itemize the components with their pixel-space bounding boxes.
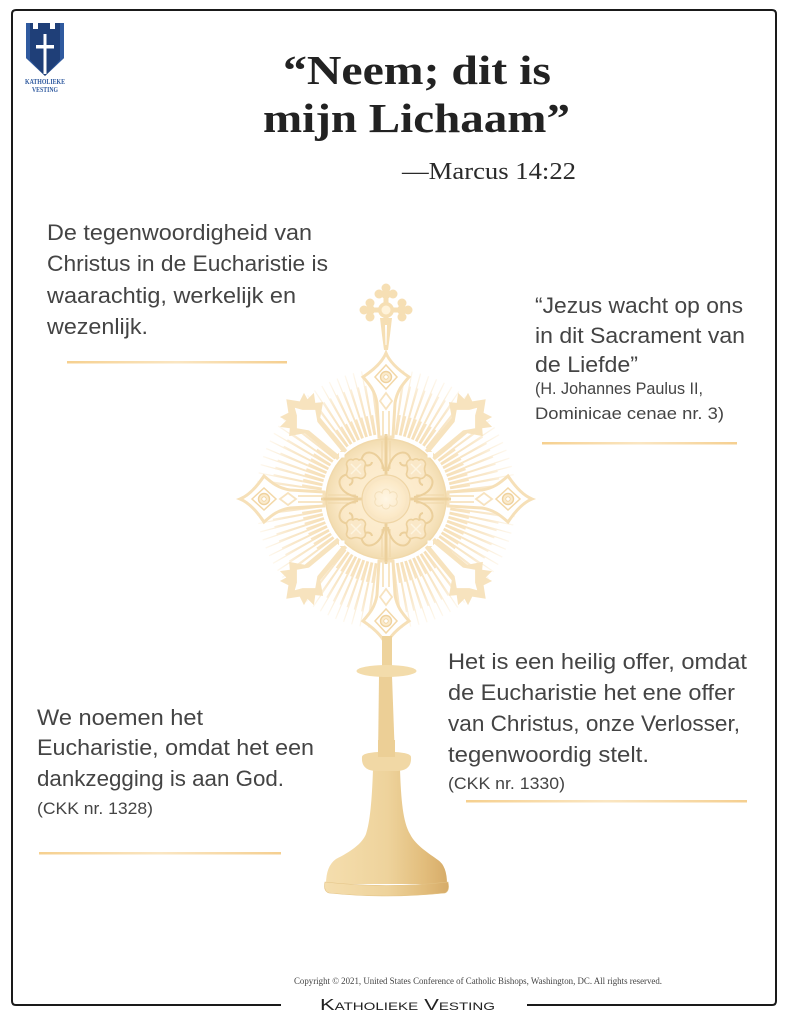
stand — [324, 636, 449, 896]
text block: holy sacrifice: de Eucharistie het ene offer — [448, 680, 736, 705]
central disc — [321, 434, 451, 564]
gold rule — [67, 361, 287, 364]
title: mijn Lichaam” — [263, 95, 570, 141]
copyright: Copyright © 2021, United States Conference of Catholic Bishops, Washington, DC. All rights reserved. — [294, 976, 662, 987]
logo: Katholieke Vesting shield: VESTING — [32, 86, 58, 94]
text block: holy sacrifice: tegenwoordig stelt. — [448, 742, 649, 767]
text block: John Paul II quote: (H. Johannes Paulus II, — [535, 379, 703, 398]
text block: real presence: waarachtig, werkelijk en — [46, 283, 296, 308]
title: “Neem; dit is — [283, 47, 551, 93]
text block: John Paul II quote: Dominicae cenae nr. 3) — [535, 404, 724, 423]
logo: Katholieke Vesting shield — [25, 23, 65, 94]
gold rule — [466, 800, 747, 802]
ornate arms — [240, 353, 532, 645]
text block: holy sacrifice — [448, 649, 748, 793]
footer brand: Katholieke Vesting — [320, 997, 495, 1014]
text block: holy sacrifice: Het is een heilig offer, omdat — [448, 649, 748, 674]
text block: John Paul II quote — [535, 293, 745, 423]
text block: John Paul II quote: de Liefde” — [535, 352, 638, 377]
text block: John Paul II quote: “Jezus wacht op ons — [535, 293, 743, 318]
text block: thanksgiving: dankzegging is aan God. — [37, 766, 284, 791]
host — [366, 479, 406, 519]
text block: real presence: wezenlijk. — [46, 314, 148, 339]
sun rays — [264, 377, 508, 621]
text block: thanksgiving — [37, 705, 314, 818]
text block: thanksgiving: (CKK nr. 1328) — [37, 799, 153, 818]
text block: real presence — [46, 220, 328, 339]
text block: thanksgiving: Eucharistie, omdat het een — [37, 735, 314, 760]
scripture reference: —Marcus 14:22 — [401, 159, 576, 185]
gold rule — [39, 852, 281, 854]
logo: Katholieke Vesting shield: KATHOLIEKE — [25, 78, 65, 86]
text block: holy sacrifice: (CKK nr. 1330) — [448, 774, 565, 793]
text block: real presence: De tegenwoordigheid van — [47, 220, 312, 245]
text block: real presence: Christus in de Eucharistie is — [47, 251, 328, 276]
text block: John Paul II quote: in dit Sacrament van — [535, 323, 745, 348]
gold rule — [542, 442, 737, 444]
monstrance — [240, 284, 532, 896]
text block: holy sacrifice: van Christus, onze Verlosser, — [448, 711, 740, 736]
icon: cross on top — [360, 284, 412, 350]
title — [263, 47, 570, 141]
text block: thanksgiving: We noemen het — [37, 705, 204, 730]
